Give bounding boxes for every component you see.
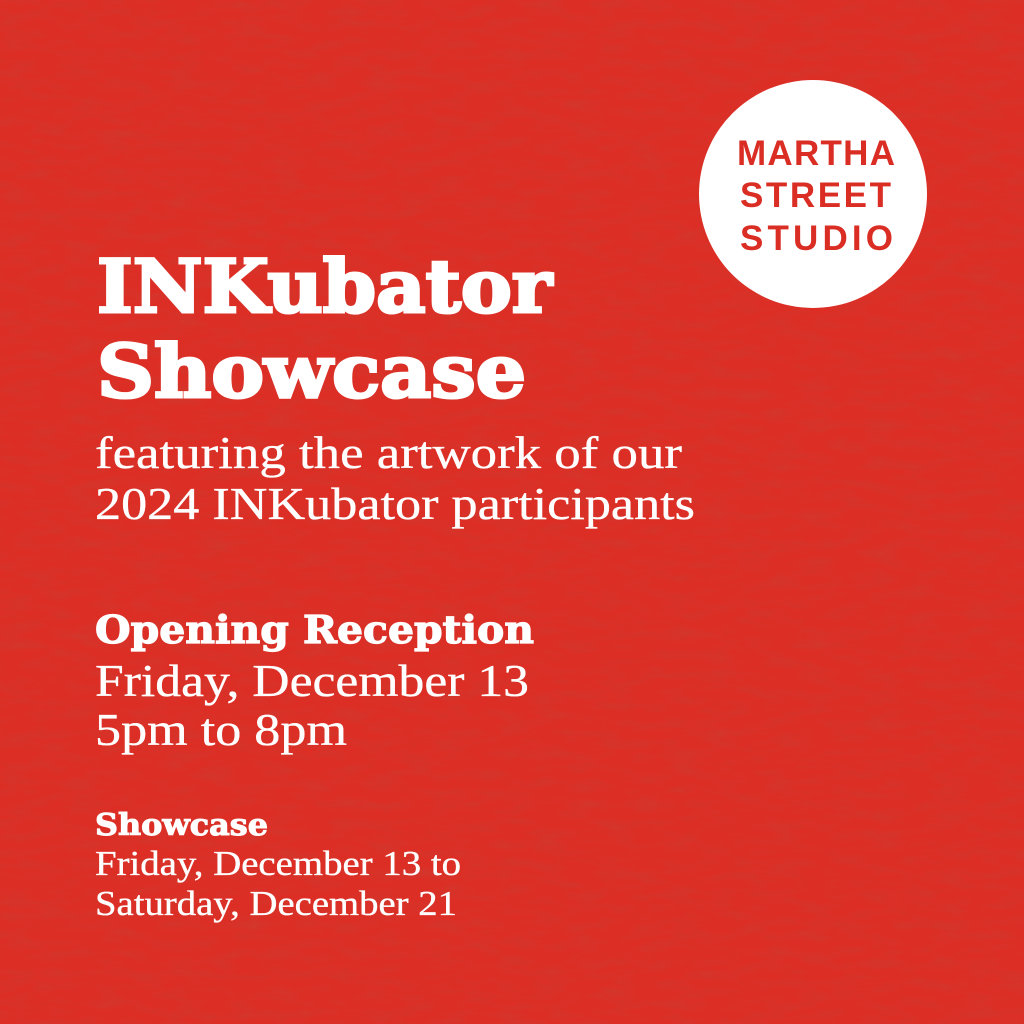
subtitle: featuring the artwork of our bbox=[95, 427, 682, 478]
logo text: Martha: MARTHA bbox=[737, 134, 895, 173]
subtitle bbox=[95, 427, 695, 529]
title: Showcase bbox=[97, 329, 526, 415]
opening reception details: 5pm to 8pm bbox=[95, 704, 347, 755]
title bbox=[97, 244, 554, 415]
showcase dates bbox=[95, 844, 461, 923]
logo badge bbox=[699, 80, 927, 308]
opening reception heading: Opening Reception bbox=[95, 607, 534, 652]
title: INKubator bbox=[97, 244, 554, 330]
showcase dates: Saturday, December 21 bbox=[95, 884, 457, 923]
showcase heading: Showcase bbox=[95, 808, 268, 843]
logo text: Street: STREET bbox=[740, 176, 891, 215]
opening reception details bbox=[95, 655, 529, 755]
logo text: Studio: STUDIO bbox=[740, 219, 893, 258]
subtitle: 2024 INKubator participants bbox=[95, 478, 695, 529]
opening reception details: Friday, December 13 bbox=[95, 655, 529, 706]
showcase dates: Friday, December 13 to bbox=[95, 844, 461, 883]
